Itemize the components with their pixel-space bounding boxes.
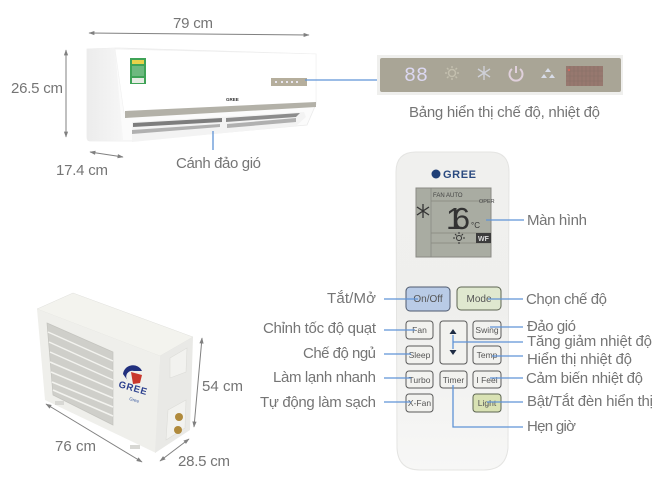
button Swing [473, 321, 501, 339]
button X-Fan: X-Fan [408, 398, 431, 408]
dimension: outdoor width 76 cm [46, 404, 142, 462]
dimension: indoor width 79 cm: 79 cm [173, 15, 213, 32]
button Timer [440, 371, 467, 388]
energy label [130, 58, 146, 84]
button Light: Light [478, 398, 497, 408]
labels: right of remote: Đảo gió [527, 318, 576, 335]
outdoor GREE logo: Gree [129, 396, 140, 404]
labels: left of remote: Chỉnh tốc độ quạt [263, 320, 377, 337]
button Sleep [406, 346, 433, 364]
dimension: indoor depth 17.4 cm: 17.4 cm [56, 162, 108, 179]
indoor unit illustration [87, 48, 316, 142]
button Light [473, 394, 501, 412]
label: display panel: Bảng hiển thị chế độ, nhiệt độ [409, 104, 600, 121]
outdoor GREE logo [117, 365, 148, 404]
display digits: 88 [404, 65, 428, 88]
labels: right of remote [526, 291, 653, 435]
sun icon [453, 232, 465, 244]
dimension: outdoor height 54 cm [194, 338, 243, 427]
labels: right of remote: Chọn chế độ [526, 291, 607, 308]
brand mark: GREE [226, 97, 239, 102]
button temperature arrows [440, 321, 467, 364]
icon: sun [445, 66, 459, 80]
button Sleep: Sleep [409, 350, 431, 360]
button Fan: Fan [412, 325, 427, 335]
button I Feel: I Feel [476, 375, 498, 385]
dimension: outdoor width 76 cm: 76 cm [55, 438, 96, 455]
LCD screen [416, 188, 495, 257]
outdoor GREE logo: GREE [117, 379, 148, 398]
mounting feet [55, 401, 140, 449]
dimension: indoor height 26.5 cm: 26.5 cm [11, 80, 63, 97]
LCD screen: OPER [479, 199, 495, 205]
labels: right of remote: Hẹn giờ [527, 418, 576, 435]
LCD screen: 16 [446, 201, 470, 236]
labels: left of remote: Chế độ ngủ [303, 345, 376, 362]
button Mode: Mode [466, 294, 492, 305]
button Temp [473, 346, 501, 364]
labels: left of remote: Tắt/Mở [327, 290, 376, 307]
labels: left of remote: Tự động làm sạch [260, 394, 376, 411]
LCD screen: °C [471, 221, 480, 230]
dimension: outdoor depth 28.5 cm [160, 439, 230, 470]
labels: right of remote: Cảm biến nhiệt độ [526, 370, 643, 387]
LCD screen: WF [478, 236, 490, 243]
copper valves [174, 413, 183, 434]
dimension: indoor height 26.5 cm [11, 50, 66, 137]
icon: drops [541, 68, 555, 78]
labels: left of remote [260, 290, 377, 411]
remote control [396, 152, 509, 470]
button Mode [457, 287, 501, 310]
leader: louver [212, 131, 214, 150]
remote logo: GREE [443, 169, 476, 181]
labels: right of remote: Bật/Tắt đèn hiển thị [527, 393, 653, 410]
icon: snowflake [478, 66, 490, 80]
labels: right of remote: Hiển thị nhiệt độ [527, 351, 632, 368]
button Timer: Timer [443, 375, 464, 385]
button On/Off: On/Off [413, 294, 443, 305]
red matrix display [566, 66, 603, 86]
labels: right of remote: Tăng giảm nhiệt độ [527, 333, 652, 350]
label: louver: Cánh đảo gió [176, 155, 261, 172]
fan grille [47, 323, 113, 425]
button X-Fan [406, 394, 433, 412]
dimension: indoor depth 17.4 cm [56, 152, 123, 179]
button Turbo [406, 371, 433, 388]
snow icon [417, 204, 429, 218]
label: screen: Màn hình [527, 212, 587, 229]
button Fan [406, 321, 433, 339]
button Turbo: Turbo [409, 375, 431, 385]
dimension: outdoor depth 28.5 cm: 28.5 cm [178, 453, 230, 470]
mini display [271, 78, 307, 86]
button Temp: Temp [477, 350, 498, 360]
button On/Off [406, 287, 450, 311]
button Swing: Swing [475, 325, 499, 335]
dimension: outdoor height 54 cm: 54 cm [202, 378, 243, 395]
leader: display [305, 79, 378, 81]
labels: left of remote: Làm lạnh nhanh [273, 369, 376, 386]
icon: power [509, 66, 522, 81]
button I Feel [473, 371, 501, 388]
outdoor unit illustration [37, 293, 193, 453]
panel: display closeup [377, 55, 623, 95]
LCD screen: FAN AUTO [433, 193, 463, 199]
leader lines: remote [384, 220, 524, 427]
